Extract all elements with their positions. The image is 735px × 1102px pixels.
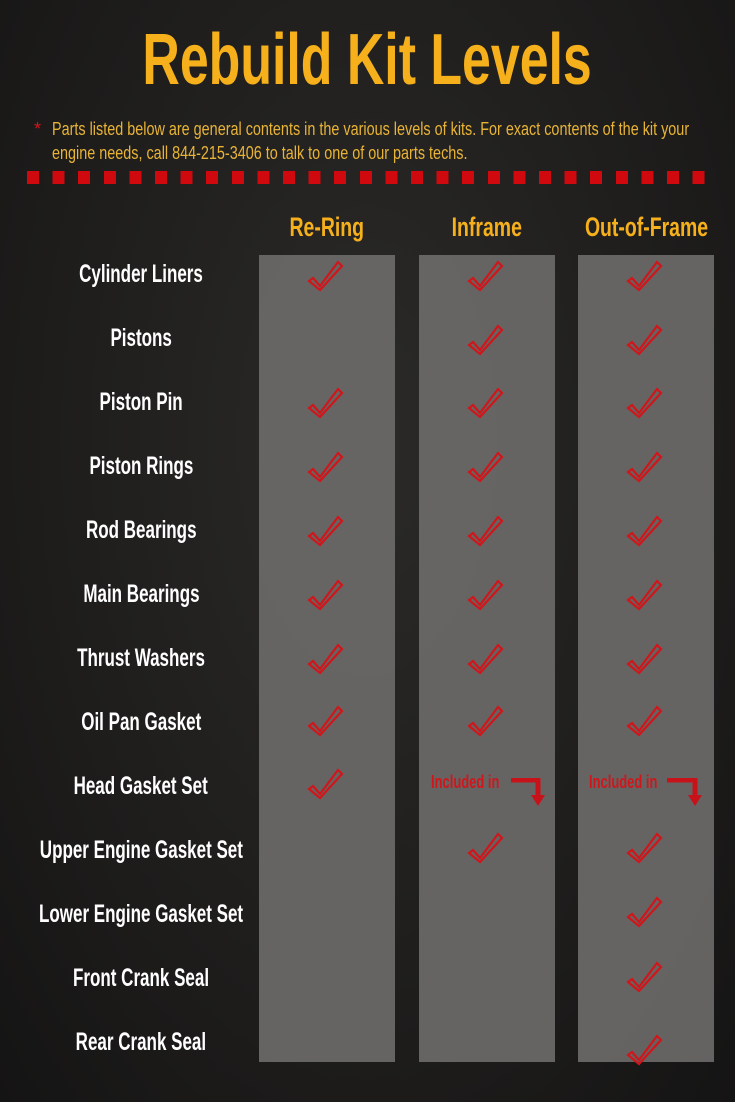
callout: included in (Inframe): Included in [431, 772, 499, 792]
row labels: Main Bearings [83, 580, 199, 608]
row labels: Rear Crank Seal [76, 1028, 206, 1056]
row labels: Rod Bearings [86, 516, 196, 544]
row labels: Head Gasket Set [74, 772, 208, 800]
dotted divider [27, 171, 717, 184]
title: Rebuild Kit Levels [143, 20, 592, 100]
callout: included in (Inframe) [431, 772, 545, 806]
column headers [290, 212, 708, 242]
column: Out-of-Frame [578, 255, 714, 1062]
row labels: Pistons [110, 324, 172, 352]
note text [34, 119, 689, 163]
note text: Parts listed below are general contents in the various levels of kits. For exact contents of the kit your [52, 119, 689, 139]
row labels: Piston Rings [89, 452, 193, 480]
row labels: Thrust Washers [77, 644, 205, 672]
column headers: Out-of-Frame [584, 212, 708, 242]
row labels: Cylinder Liners [79, 260, 203, 288]
row labels: Upper Engine Gasket Set [39, 836, 243, 864]
row labels: Oil Pan Gasket [81, 708, 201, 736]
column: Inframe [419, 255, 555, 1062]
column headers: Re-Ring [290, 212, 364, 242]
row labels: Lower Engine Gasket Set [39, 900, 243, 928]
row labels [39, 260, 243, 1056]
callout: included in (Out-of-Frame): Included in [589, 772, 657, 792]
row labels: Front Crank Seal [73, 964, 209, 992]
callout: included in (Out-of-Frame) [589, 772, 702, 806]
column headers: Inframe [452, 212, 522, 242]
column: Re-Ring [259, 255, 395, 1062]
row labels: Piston Pin [99, 388, 183, 416]
note text: engine needs, call 844-215-3406 to talk to one of our parts techs. [52, 143, 467, 163]
note text: * [34, 119, 41, 139]
